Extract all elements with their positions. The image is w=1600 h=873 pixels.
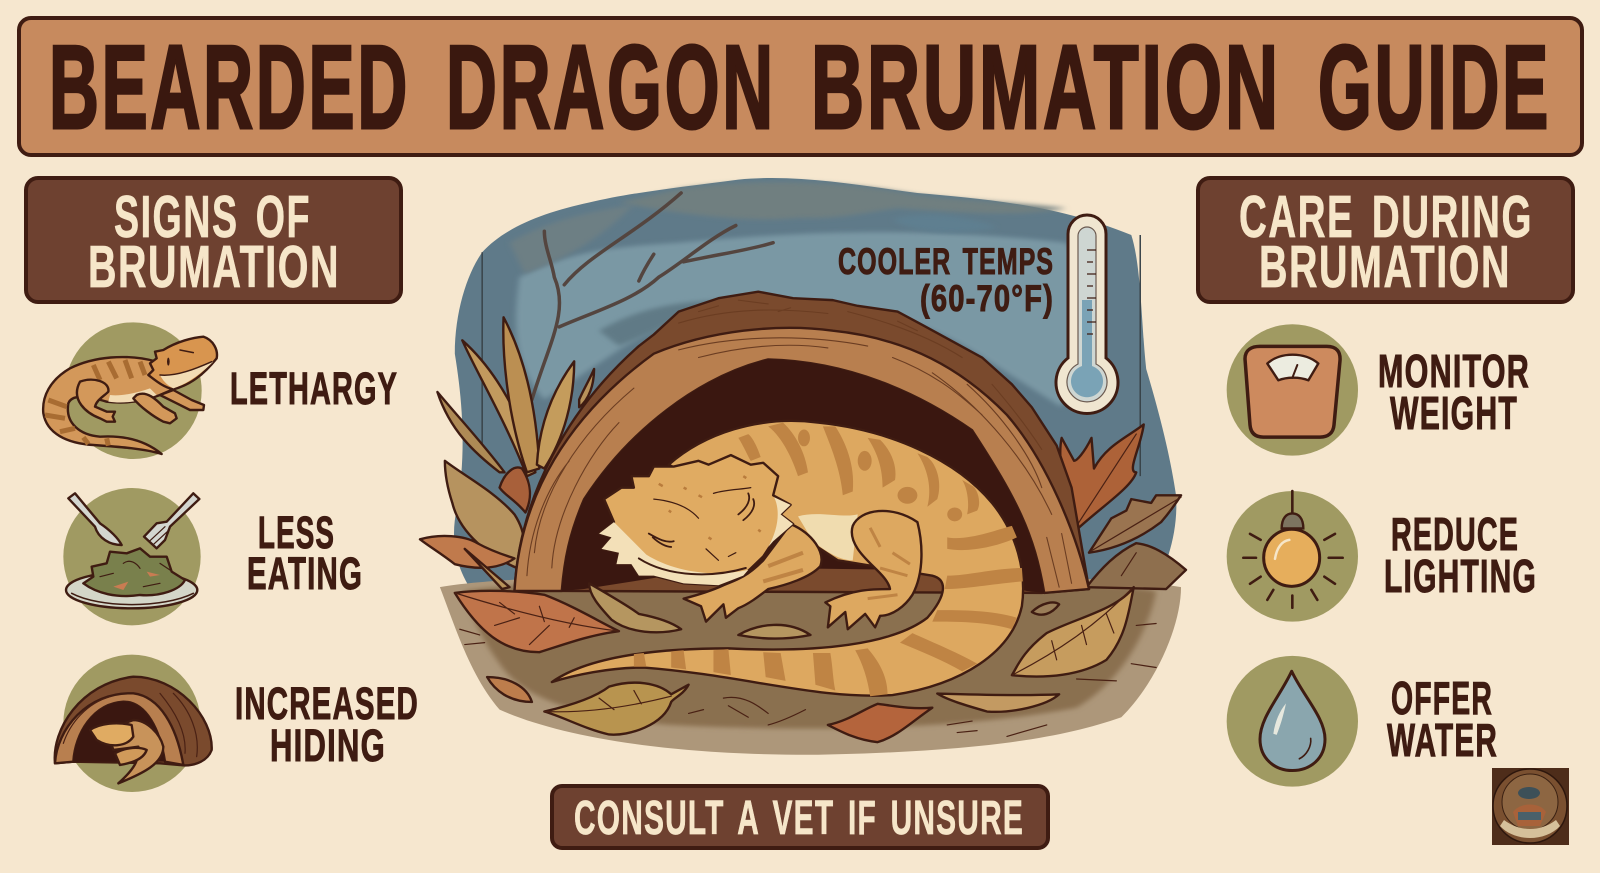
central illustration: sleeping bearded dragon in hide [420,178,1186,755]
label: offer water: WATER [1387,714,1498,766]
title banner [19,18,1582,155]
label: lethargy: LETHARGY [230,363,398,414]
label: less eating [247,507,363,599]
sign 3: increased hiding icon [55,655,212,792]
panel: signs of brumation heading: SIGNS OF [114,184,311,250]
label: less eating: EATING [247,548,363,599]
log hide [515,292,1089,593]
callout: cooler temps: COOLER TEMPS [838,241,1054,282]
sign 2: less eating icon [63,488,201,625]
panel: signs of brumation heading [26,178,401,302]
title banner: BEARDED [49,21,410,154]
callout: cooler temps: (60-70°F) [920,278,1054,319]
callout: consult a vet: CONSULT A VET IF UNSURE [574,792,1024,845]
care 2: reduce lighting icon [1227,491,1358,622]
label: increased hiding: HIDING [270,720,386,771]
panel: care during brumation heading [1198,178,1573,302]
care 3: offer water icon [1227,656,1358,787]
care 1: monitor weight icon [1227,324,1358,456]
label: reduce lighting: REDUCE [1391,508,1519,560]
leaves behind hide [420,424,1186,589]
dragon rear leg [825,511,921,629]
plant blades [437,317,594,476]
dragon front arm [684,524,821,622]
foreground leaves [455,583,1134,742]
label: monitor weight [1378,345,1530,439]
cool blue backdrop [454,178,1176,595]
dragon head with beard [599,455,793,585]
panel: signs of brumation heading: BRUMATION [88,234,340,300]
label: less eating: LESS [258,507,335,558]
ground [440,573,1181,755]
label: increased hiding: INCREASED [235,678,419,729]
title banner: DRAGON [446,21,776,154]
logo badge [1492,768,1569,845]
callout: cooler temps [838,241,1054,319]
label: monitor weight: WEIGHT [1390,387,1518,439]
title banner: BRUMATION [811,21,1281,154]
label: increased hiding [235,678,419,771]
callout: consult a vet [552,786,1048,848]
label: reduce lighting [1384,508,1537,602]
thermometer [1056,215,1118,413]
dragon body and tail [552,421,1023,696]
dead tree branches [532,193,773,400]
sign 1: lethargy icon [43,322,217,459]
label: offer water [1387,672,1498,766]
label: offer water: OFFER [1391,672,1493,724]
